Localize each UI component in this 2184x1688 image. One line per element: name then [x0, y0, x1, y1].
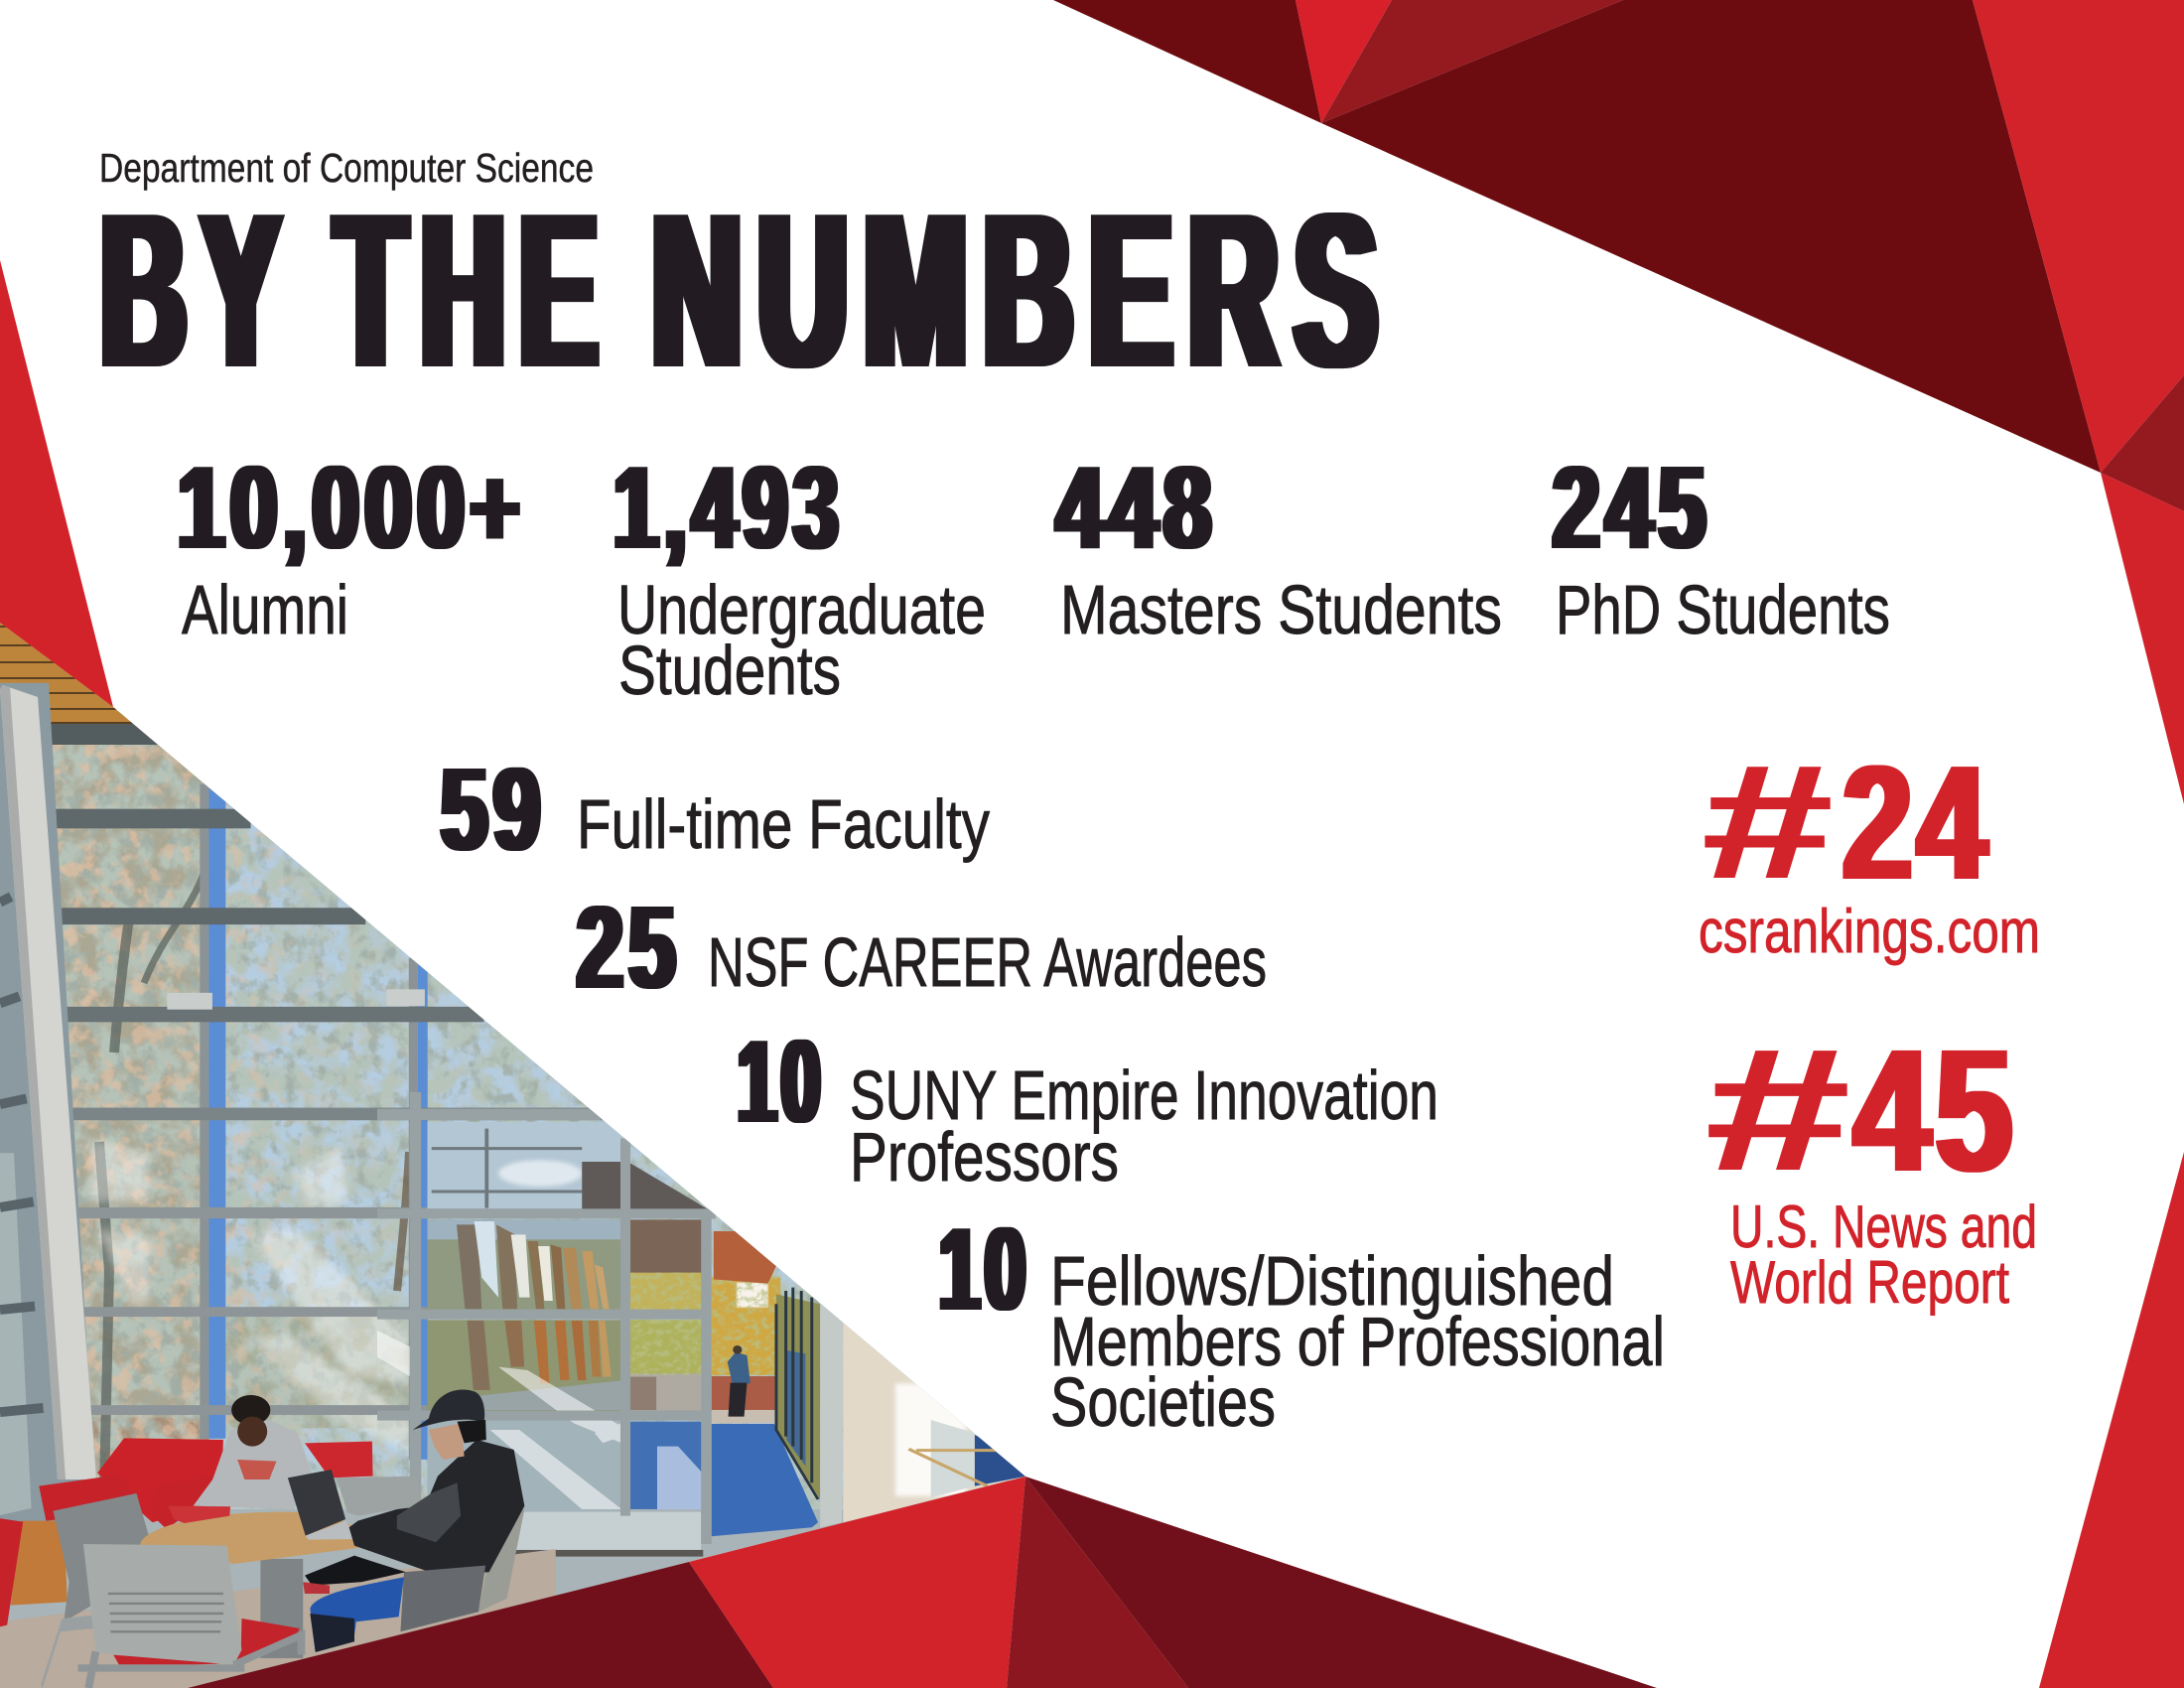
magazine — [169, 1506, 230, 1523]
top right geometric shapes — [1053, 0, 2184, 804]
glass balustrade — [908, 1420, 1026, 1497]
rank number: # — [1703, 1013, 1845, 1207]
left red chair — [0, 1518, 23, 1626]
right lower red shape — [2101, 473, 2184, 804]
ranking: csrankings — [1699, 731, 2040, 966]
source label: csrankings.com — [1699, 898, 2040, 966]
wood ceiling — [0, 623, 141, 730]
stat: fellows and distinguished members — [939, 1203, 1665, 1441]
upper slat pane — [428, 1219, 621, 1311]
title: BY — [101, 168, 296, 414]
rank number — [1700, 731, 1991, 914]
label: PhD Students — [1556, 571, 1890, 648]
sofa arm — [39, 1475, 212, 1529]
grey mullions — [377, 1092, 716, 1544]
window mullions — [46, 783, 704, 1460]
source label — [1730, 1194, 2037, 1316]
laptop — [288, 1470, 345, 1536]
number: 245 — [1553, 442, 1711, 574]
stat: phd students — [1553, 442, 1890, 648]
blue door pane — [630, 1422, 703, 1509]
label: Members of Professional — [1050, 1303, 1665, 1380]
blue vertical mullions — [208, 783, 428, 1460]
terrace floor strip — [712, 1410, 780, 1423]
source label: World Report — [1730, 1249, 2009, 1316]
right medium triangle — [2101, 375, 2184, 511]
corner red shape — [1973, 0, 2184, 473]
label: Professors — [850, 1118, 1119, 1196]
left grey chair — [54, 1493, 149, 1621]
horizontal mullions — [46, 809, 704, 1415]
rank number: 45 — [1853, 1014, 2017, 1208]
beams of sun — [377, 1331, 702, 1509]
bottom dark right — [1025, 1477, 1657, 1688]
ranking: us news — [1703, 1013, 2037, 1316]
door top pane — [630, 1219, 703, 1276]
bottom red — [689, 1477, 1025, 1688]
stat: suny empire innovation professors — [738, 1016, 1438, 1196]
label: NSF CAREER Awardees — [708, 923, 1267, 1001]
blue walkway floor — [712, 1424, 818, 1536]
lower grey pane — [428, 1420, 621, 1511]
seating area — [0, 1389, 556, 1688]
dark red main shape — [1053, 0, 1321, 123]
sunlight streaks — [90, 1139, 411, 1453]
concrete column — [820, 1304, 843, 1527]
label: Alumni — [182, 571, 348, 648]
foliage mottling — [630, 1273, 780, 1375]
sky pane — [428, 1122, 621, 1208]
label: Undergraduate — [617, 571, 986, 648]
label: Full-time Faculty — [577, 785, 990, 863]
brick wall — [712, 1376, 780, 1411]
orange canopy — [714, 1231, 776, 1284]
left wall panels — [0, 683, 94, 1522]
table leg — [260, 1559, 303, 1658]
large dark triangle — [1321, 0, 2101, 473]
opening foliage — [712, 1278, 780, 1375]
pergola frame reflection — [432, 1129, 582, 1208]
number: 25 — [577, 882, 681, 1014]
department subtitle: Department of Computer Science — [99, 145, 594, 191]
lower slat pane — [428, 1320, 621, 1411]
source label: U.S. News and — [1730, 1194, 2037, 1260]
number: 1,493 — [614, 442, 844, 574]
sofa right back — [305, 1442, 373, 1477]
number: 10,000+ — [178, 442, 525, 574]
title: THE — [336, 168, 613, 414]
tree trunks — [99, 874, 409, 1489]
clouds — [498, 1160, 582, 1187]
label: Fellows/Distinguished — [1050, 1242, 1614, 1320]
heater unit — [511, 1512, 701, 1550]
number: 59 — [441, 744, 546, 876]
student two jacket — [349, 1440, 524, 1576]
floor — [0, 1549, 556, 1688]
glass wall backing — [776, 1294, 820, 1499]
bottom medium — [1007, 1477, 1188, 1688]
person on walkway — [728, 1345, 751, 1417]
structural column — [0, 685, 96, 1479]
title — [101, 168, 1394, 414]
stat: full-time faculty — [441, 744, 990, 876]
label: Societies — [1050, 1363, 1276, 1441]
label — [850, 1056, 1438, 1196]
rank number — [1703, 1013, 2017, 1208]
bottom right red triangle — [2039, 1152, 2184, 1688]
orange cube — [11, 1521, 68, 1606]
front chair seat — [113, 1618, 300, 1667]
number: 10 — [939, 1203, 1030, 1336]
number: 10 — [738, 1016, 825, 1148]
left red triangle — [0, 260, 113, 707]
photo: students in glass atrium — [0, 616, 1092, 1688]
glazing with trees — [52, 745, 1003, 1509]
bright red sliver — [1296, 0, 1392, 123]
pergola slats upper — [457, 1221, 610, 1309]
label — [617, 571, 986, 709]
front chair back — [83, 1544, 241, 1665]
chair behind student two — [337, 1477, 422, 1516]
label: SUNY Empire Innovation — [850, 1056, 1438, 1134]
door yellow foliage — [630, 1273, 703, 1311]
label — [1050, 1242, 1665, 1441]
table top — [140, 1512, 363, 1564]
sofa back — [97, 1438, 223, 1522]
student one hoodie — [194, 1420, 312, 1509]
number: 448 — [1056, 442, 1217, 574]
student two head and cap — [429, 1423, 465, 1460]
stat: alumni — [178, 442, 525, 648]
outdoor view, terrace and corridor — [377, 1092, 1029, 1557]
building reflection — [582, 1162, 712, 1211]
dark glass frames — [776, 1288, 818, 1499]
rail and roof reflection — [479, 1380, 620, 1410]
bottom geometric shapes — [188, 1477, 1657, 1688]
stat: masters students — [1056, 442, 1502, 648]
stat: undergraduate students — [614, 442, 986, 709]
stat: nsf career awardees — [577, 882, 1267, 1014]
label: Students — [618, 632, 841, 709]
student one head — [231, 1395, 270, 1425]
rank number: 24 — [1843, 732, 1991, 914]
rank number: # — [1700, 731, 1829, 913]
grey vertical mullions — [200, 783, 418, 1460]
dark ceiling band — [52, 724, 159, 746]
title: NUMBERS — [652, 168, 1394, 414]
front chair frame — [78, 1635, 301, 1688]
bottom dark left — [188, 1562, 773, 1688]
medium red triangle — [1321, 0, 1623, 123]
cream wall — [843, 1304, 1029, 1522]
label: Masters Students — [1060, 571, 1502, 648]
student two jeans — [310, 1577, 404, 1651]
dark bag — [305, 1556, 406, 1586]
